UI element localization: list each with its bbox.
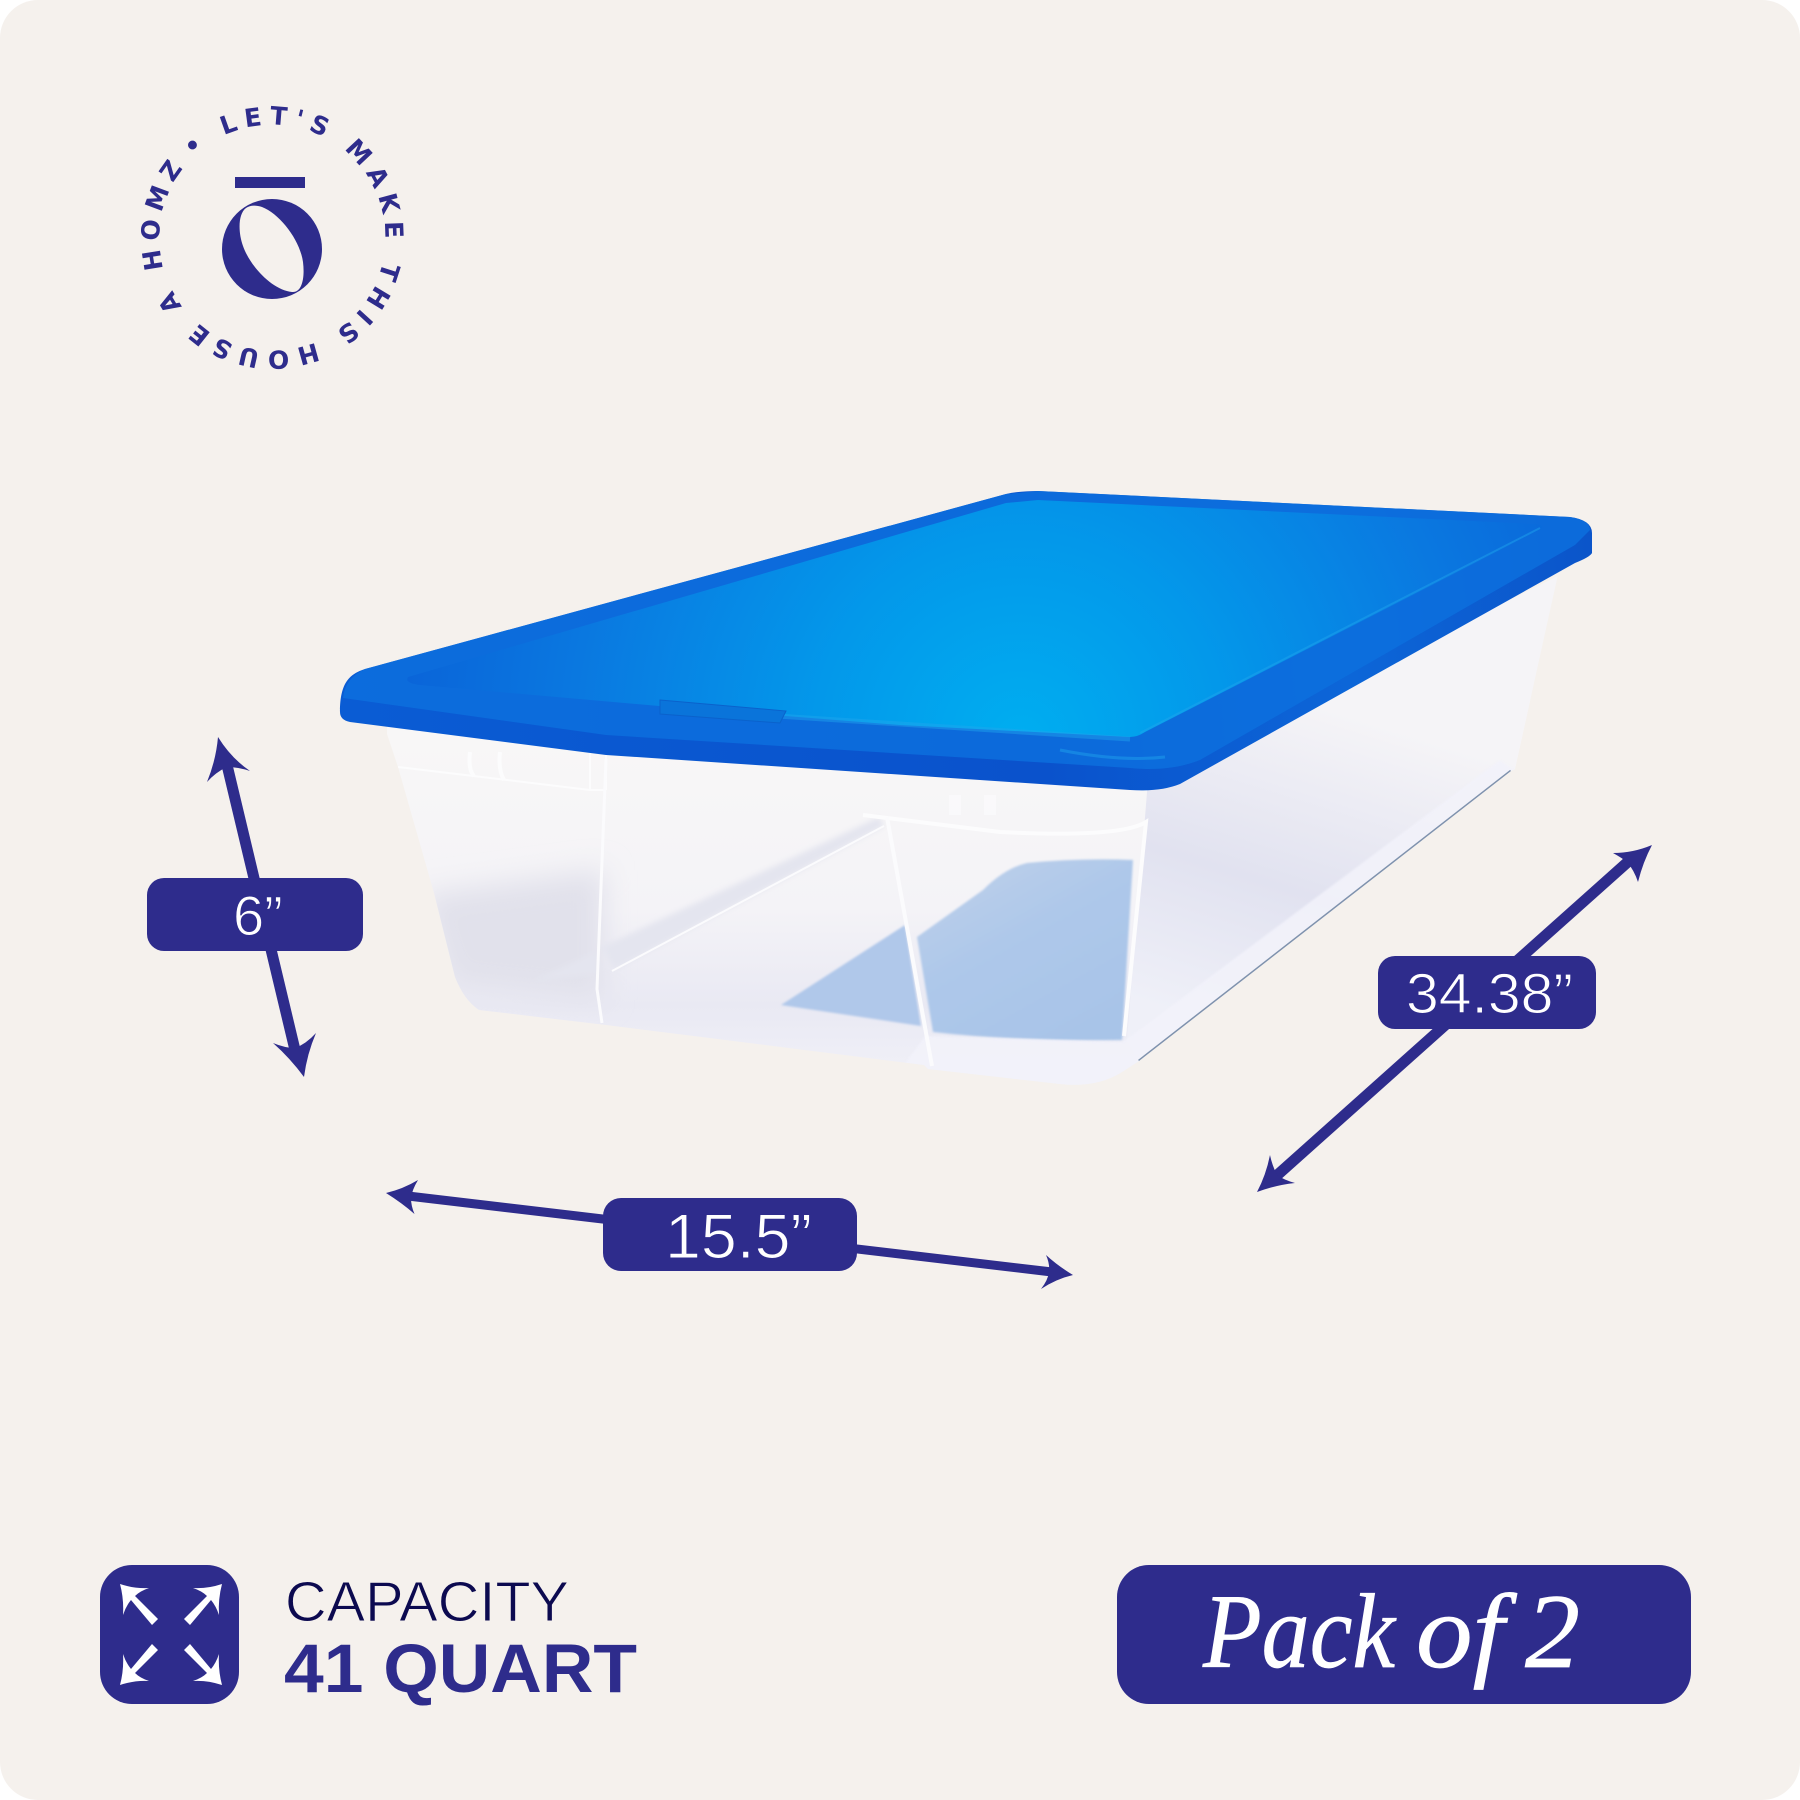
dimension: width 15.5 in [386,1180,1073,1289]
box left panel shading [434,871,607,988]
dimension: length 34.38 in [1257,845,1652,1192]
pack text: 2 [1525,1573,1580,1690]
box handle tabs [870,815,1148,1036]
logo letter o [222,199,322,299]
logo macron bar [235,177,305,188]
capacity value: 41 QUART [284,1630,637,1707]
box interior blue reflection [781,859,1133,1040]
width arrow [386,1180,1073,1289]
pack of 2 badge [1117,1565,1691,1704]
width value: 15.5” [665,1202,812,1272]
width label [603,1198,857,1271]
length value: 34.38” [1406,962,1573,1026]
box lid [340,491,1592,790]
length label [1378,956,1596,1029]
box bottom rim [986,840,1406,1042]
pack text: of [1416,1573,1517,1690]
capacity label: CAPACITY [285,1570,569,1634]
lid centre panel [407,500,1542,737]
box middle diagonal reflection [612,819,882,972]
lid embossed label [660,700,786,723]
box body [380,570,1570,1100]
box seams [596,856,934,1066]
icon: expand arrows [100,1565,239,1704]
lid rim top surface [343,491,1590,769]
pack text [1202,1573,1580,1690]
lid light edge reflections [700,528,1540,758]
height arrow [207,737,316,1077]
logo ring text: • LET'S MAKE THIS HOUSE A HOMZ [140,106,404,370]
length arrow [1257,845,1652,1192]
box right side face [1137,576,1558,948]
product: storage box [340,491,1592,1100]
height value: 6” [233,884,283,947]
logo badge [140,106,404,370]
height label [147,878,363,951]
dimension: height 6 in [147,737,363,1077]
box bottom edge line [1139,771,1511,1061]
pack text: Pack [1202,1573,1397,1690]
capacity block [100,1565,637,1707]
